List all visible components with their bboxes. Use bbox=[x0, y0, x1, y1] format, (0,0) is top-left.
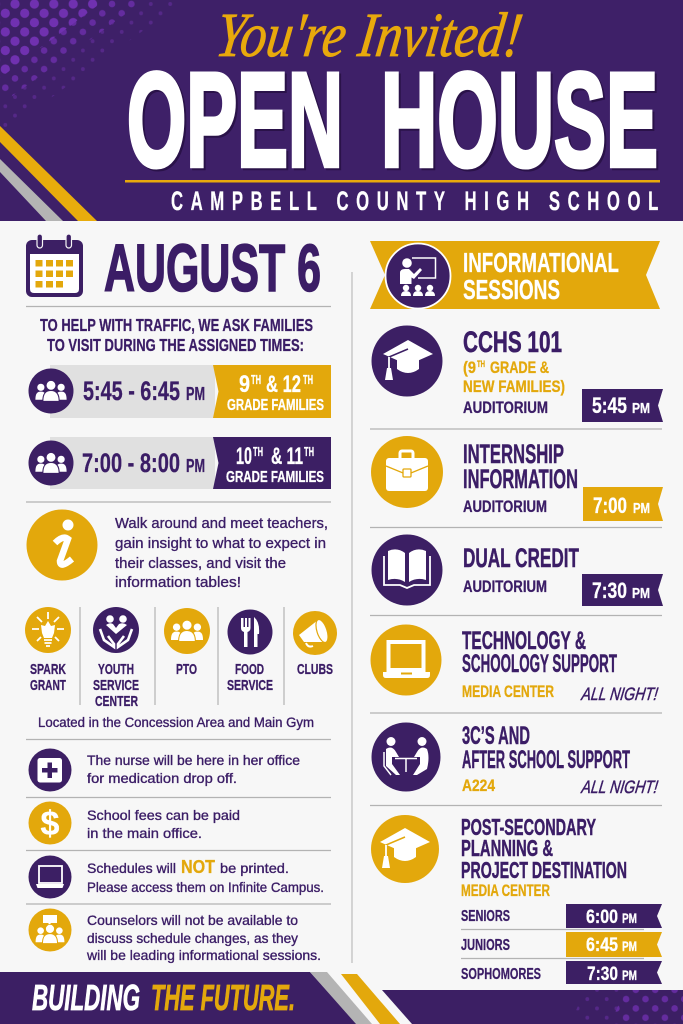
icon: book bbox=[372, 534, 442, 606]
time row: 7:00 - 8:00 PM: GRADE FAMILIES bbox=[226, 469, 324, 486]
session: CCHS 101: (9 bbox=[463, 358, 476, 377]
text: walk around bbox=[115, 515, 328, 591]
label: spark grant: SPARK bbox=[30, 662, 66, 678]
time row: 7:00 - 8:00 PM: TH bbox=[304, 445, 314, 459]
header band bbox=[0, 0, 683, 221]
schedule row: juniors: 6:45 bbox=[586, 935, 618, 956]
subtitle: school name: CAMPBELL COUNTY HIGH SCHOOL bbox=[171, 186, 659, 216]
schedule row: sophomores bbox=[461, 961, 662, 985]
panel: notes bbox=[26, 748, 331, 963]
tagline bbox=[32, 977, 295, 1018]
text: schedules note: Schedules will bbox=[87, 860, 176, 876]
text: nurse note: for medication drop off. bbox=[87, 770, 237, 786]
halftone dots: bottom right bbox=[570, 990, 683, 1024]
halftone dots: top left bbox=[0, 0, 185, 135]
schedule row: seniors bbox=[461, 904, 662, 928]
text: schedules note: NOT bbox=[181, 857, 215, 877]
session: technology and schoology support bbox=[370, 624, 659, 704]
session: CCHS 101: TH bbox=[477, 359, 485, 370]
icon: graduation cap bbox=[372, 326, 442, 396]
footer bbox=[0, 972, 683, 1024]
session: post-secondary planning and project destination: POST-SECONDARY bbox=[461, 814, 596, 840]
text: walk around: information tables! bbox=[115, 574, 241, 591]
label: spark grant bbox=[30, 662, 66, 694]
icon: graduation cap bbox=[371, 815, 439, 883]
time row: 5:45 - 6:45 PM: TH bbox=[303, 373, 313, 387]
icon: counselors bbox=[28, 908, 72, 952]
session: technology and schoology support: TECHNOLOGY & bbox=[462, 627, 586, 655]
time row: 5:45 - 6:45 PM: & 12 bbox=[266, 371, 301, 398]
label: clubs: CLUBS bbox=[297, 662, 333, 678]
time tag: 7:00 bbox=[593, 493, 627, 518]
session: internship information: INFORMATION bbox=[463, 464, 578, 494]
time tag: 5:45 bbox=[592, 393, 627, 418]
session: 3C's and after school support: A224 bbox=[462, 777, 496, 795]
text: location: Located in the Concession Area and Main Gym bbox=[38, 715, 314, 730]
time row: 5:45 - 6:45 PM: PM bbox=[186, 384, 205, 404]
time tag: PM bbox=[633, 500, 650, 517]
schedule row: seniors: 6:00 bbox=[586, 907, 618, 928]
session: 3C's and after school support: 3C’S AND bbox=[462, 722, 530, 750]
label: food service: SERVICE bbox=[227, 678, 273, 694]
label: youth service center: SERVICE bbox=[93, 678, 139, 694]
time row: 7:00 - 8:00 PM: 7:00 - 8:00 bbox=[82, 448, 180, 478]
session: dual credit: DUAL CREDIT bbox=[463, 543, 579, 573]
traffic note: TO HELP WITH TRAFFIC, WE ASK FAMILIES bbox=[40, 315, 313, 335]
session: post-secondary planning and project destination: PLANNING & bbox=[461, 835, 553, 861]
text: counselors note bbox=[86, 912, 321, 963]
icon: youth service center bbox=[93, 607, 139, 653]
text: schedules note: Please access them on Infinite Campus. bbox=[87, 879, 324, 895]
icon: dollar bbox=[28, 802, 72, 844]
time row: 5:45 - 6:45 PM: 9 bbox=[239, 371, 250, 398]
label: spark grant: GRANT bbox=[30, 678, 66, 694]
session: CCHS 101: AUDITORIUM bbox=[463, 398, 548, 417]
schedule row: sophomores: 7:30 bbox=[587, 964, 618, 985]
icon: info bbox=[26, 510, 98, 580]
text: schedules note: be printed. bbox=[220, 860, 289, 876]
schedule row: sophomores: SOPHOMORES bbox=[461, 966, 541, 983]
session: 3C's and after school support: ALL NIGHT! bbox=[580, 777, 659, 797]
time tag: PM bbox=[632, 400, 650, 417]
schedule row: seniors: PM bbox=[622, 911, 637, 926]
time row: 7:00 - 8:00 PM bbox=[28, 437, 331, 489]
schedule row: juniors: PM bbox=[622, 939, 637, 954]
info table dividers bbox=[80, 607, 284, 705]
text: fees note: in the main office. bbox=[87, 825, 202, 841]
text: counselors note: will be leading informational sessions. bbox=[86, 947, 321, 963]
session: internship information: AUDITORIUM bbox=[463, 497, 547, 516]
text: walk around: gain insight to what to expect in bbox=[115, 535, 326, 552]
session: post-secondary planning and project destination: MEDIA CENTER bbox=[461, 882, 550, 900]
session: CCHS 101: GRADE & bbox=[490, 358, 549, 377]
text: walk around: their classes, and visit the bbox=[115, 555, 286, 572]
text: counselors note: discuss schedule changes, as they bbox=[87, 930, 298, 946]
label: youth service center: CENTER bbox=[95, 694, 138, 710]
time tag: PM bbox=[632, 585, 650, 602]
panel: informational sessions bbox=[370, 241, 663, 985]
text: walk around: Walk around and meet teachers, bbox=[115, 515, 328, 532]
time tag bbox=[582, 389, 663, 422]
ribbon heading: SESSIONS bbox=[463, 274, 560, 305]
label: food service bbox=[227, 662, 273, 694]
text: schedules note bbox=[87, 857, 324, 895]
icon: two people at table bbox=[372, 722, 440, 792]
session: post-secondary planning and project destination bbox=[371, 814, 662, 985]
session: technology and schoology support: MEDIA CENTER bbox=[462, 683, 554, 701]
heading: August 6: AUGUST 6 bbox=[104, 231, 321, 306]
schedule row: juniors: JUNIORS bbox=[461, 937, 510, 954]
stripes: gold and gray bbox=[0, 126, 97, 221]
icon: dollar: $ bbox=[41, 805, 60, 843]
icon: laptop bbox=[370, 624, 442, 696]
label: pto: PTO bbox=[176, 662, 197, 678]
tagline: BUILDING bbox=[32, 977, 140, 1018]
icon: pto bbox=[164, 608, 210, 654]
icon: families bbox=[28, 368, 74, 414]
icon: families bbox=[28, 440, 74, 486]
session: dual credit: AUDITORIUM bbox=[463, 577, 547, 596]
schedule row: sophomores: PM bbox=[622, 968, 637, 983]
text: counselors note: Counselors will not be available to bbox=[87, 912, 298, 928]
text: fees note bbox=[87, 807, 240, 841]
time tag bbox=[582, 574, 663, 606]
session: CCHS 101: NEW FAMILIES) bbox=[463, 377, 565, 396]
label: youth service center bbox=[93, 662, 139, 710]
time row: 5:45 - 6:45 PM: 5:45 - 6:45 bbox=[83, 376, 180, 406]
panel: date and arrival times bbox=[26, 231, 331, 502]
session: technology and schoology support: ALL NIGHT! bbox=[580, 684, 659, 704]
time row: 5:45 - 6:45 PM bbox=[28, 365, 331, 418]
time tag bbox=[583, 487, 663, 521]
traffic note: TO VISIT DURING THE ASSIGNED TIMES: bbox=[47, 335, 304, 355]
time row: 5:45 - 6:45 PM: TH bbox=[251, 373, 261, 387]
gold rule under title bbox=[125, 180, 660, 182]
text: nurse note: The nurse will be here in her office bbox=[87, 752, 300, 768]
icon: laptop bbox=[28, 856, 72, 898]
icon: presentation bbox=[386, 244, 450, 308]
traffic note bbox=[40, 315, 313, 355]
icon: briefcase bbox=[371, 436, 443, 508]
icon: spark grant bbox=[25, 607, 71, 653]
label: food service: FOOD bbox=[235, 662, 264, 678]
ribbon heading bbox=[370, 241, 660, 309]
label: youth service center: YOUTH bbox=[98, 662, 134, 678]
time row: 7:00 - 8:00 PM: 10 bbox=[236, 443, 252, 470]
title: OPEN HOUSE: OPEN bbox=[127, 46, 343, 195]
time row: 7:00 - 8:00 PM: & 11 bbox=[271, 443, 303, 470]
session: 3C's and after school support bbox=[372, 722, 659, 797]
session: internship information bbox=[371, 436, 663, 521]
session: internship information: INTERNSHIP bbox=[463, 439, 564, 469]
schedule row: seniors: SENIORS bbox=[461, 908, 510, 925]
script heading: You're Invited!: You're Invited! bbox=[212, 0, 527, 70]
schedule row: juniors bbox=[461, 932, 662, 957]
time row: 5:45 - 6:45 PM: GRADE FAMILIES bbox=[227, 397, 324, 414]
session: CCHS 101: CCHS 101 bbox=[463, 326, 562, 359]
icon: clubs megaphone bbox=[293, 611, 337, 655]
time row: 7:00 - 8:00 PM: PM bbox=[186, 456, 205, 476]
icon: nurse bbox=[28, 748, 72, 792]
time tag: 7:30 bbox=[592, 578, 627, 603]
text: nurse note bbox=[87, 752, 300, 786]
time row: 7:00 - 8:00 PM: TH bbox=[253, 445, 263, 459]
icon: calendar bbox=[26, 234, 83, 297]
session: dual credit bbox=[372, 534, 663, 606]
icon: food service bbox=[228, 610, 272, 654]
session: CCHS 101 bbox=[372, 326, 663, 422]
panel: information tables bbox=[25, 510, 337, 740]
text: fees note: School fees can be paid bbox=[87, 807, 240, 823]
tagline: THE FUTURE. bbox=[151, 977, 295, 1018]
